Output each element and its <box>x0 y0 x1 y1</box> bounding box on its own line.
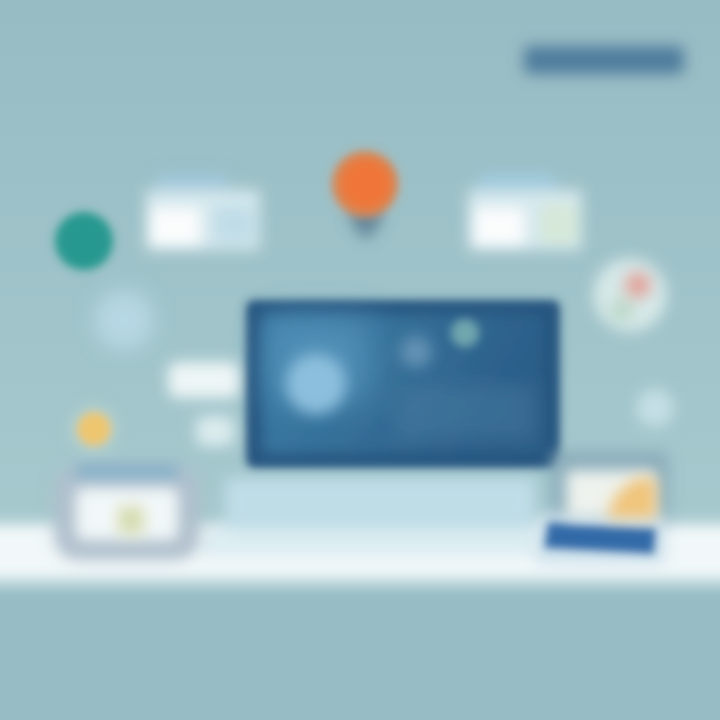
laptop base <box>544 522 656 554</box>
screen teal circle <box>451 319 479 347</box>
left info card <box>146 174 260 250</box>
screen main circle <box>286 354 346 414</box>
tablet left <box>54 464 200 560</box>
tablet top edge <box>76 464 178 480</box>
laptop right <box>536 452 668 564</box>
tablet accent <box>118 506 144 534</box>
screen small circle <box>400 336 432 368</box>
laptop screen <box>566 470 656 518</box>
right info card <box>468 174 582 250</box>
white chat label upper <box>168 362 240 398</box>
logo top right <box>524 46 684 74</box>
laptop back glow <box>552 452 668 524</box>
tablet screen <box>76 488 178 540</box>
monitor frame <box>246 300 560 468</box>
icon: small pale circle <box>636 389 674 427</box>
tablet frame <box>54 466 200 560</box>
icon: orange location pin <box>332 151 398 240</box>
monitor screen <box>262 314 544 454</box>
laptop chart <box>606 478 656 518</box>
monitor <box>246 300 560 468</box>
icon: yellow coin <box>70 405 118 453</box>
icon: teal circle <box>55 212 113 270</box>
screen lower panel <box>395 385 535 440</box>
icon: pale blue circle <box>94 290 154 350</box>
screen glow left <box>270 320 370 400</box>
desk surface <box>0 478 720 580</box>
white chat label lower <box>196 416 234 446</box>
lower band <box>0 592 720 720</box>
icon: pie chart circle <box>593 258 667 332</box>
laptop halo <box>536 514 666 564</box>
